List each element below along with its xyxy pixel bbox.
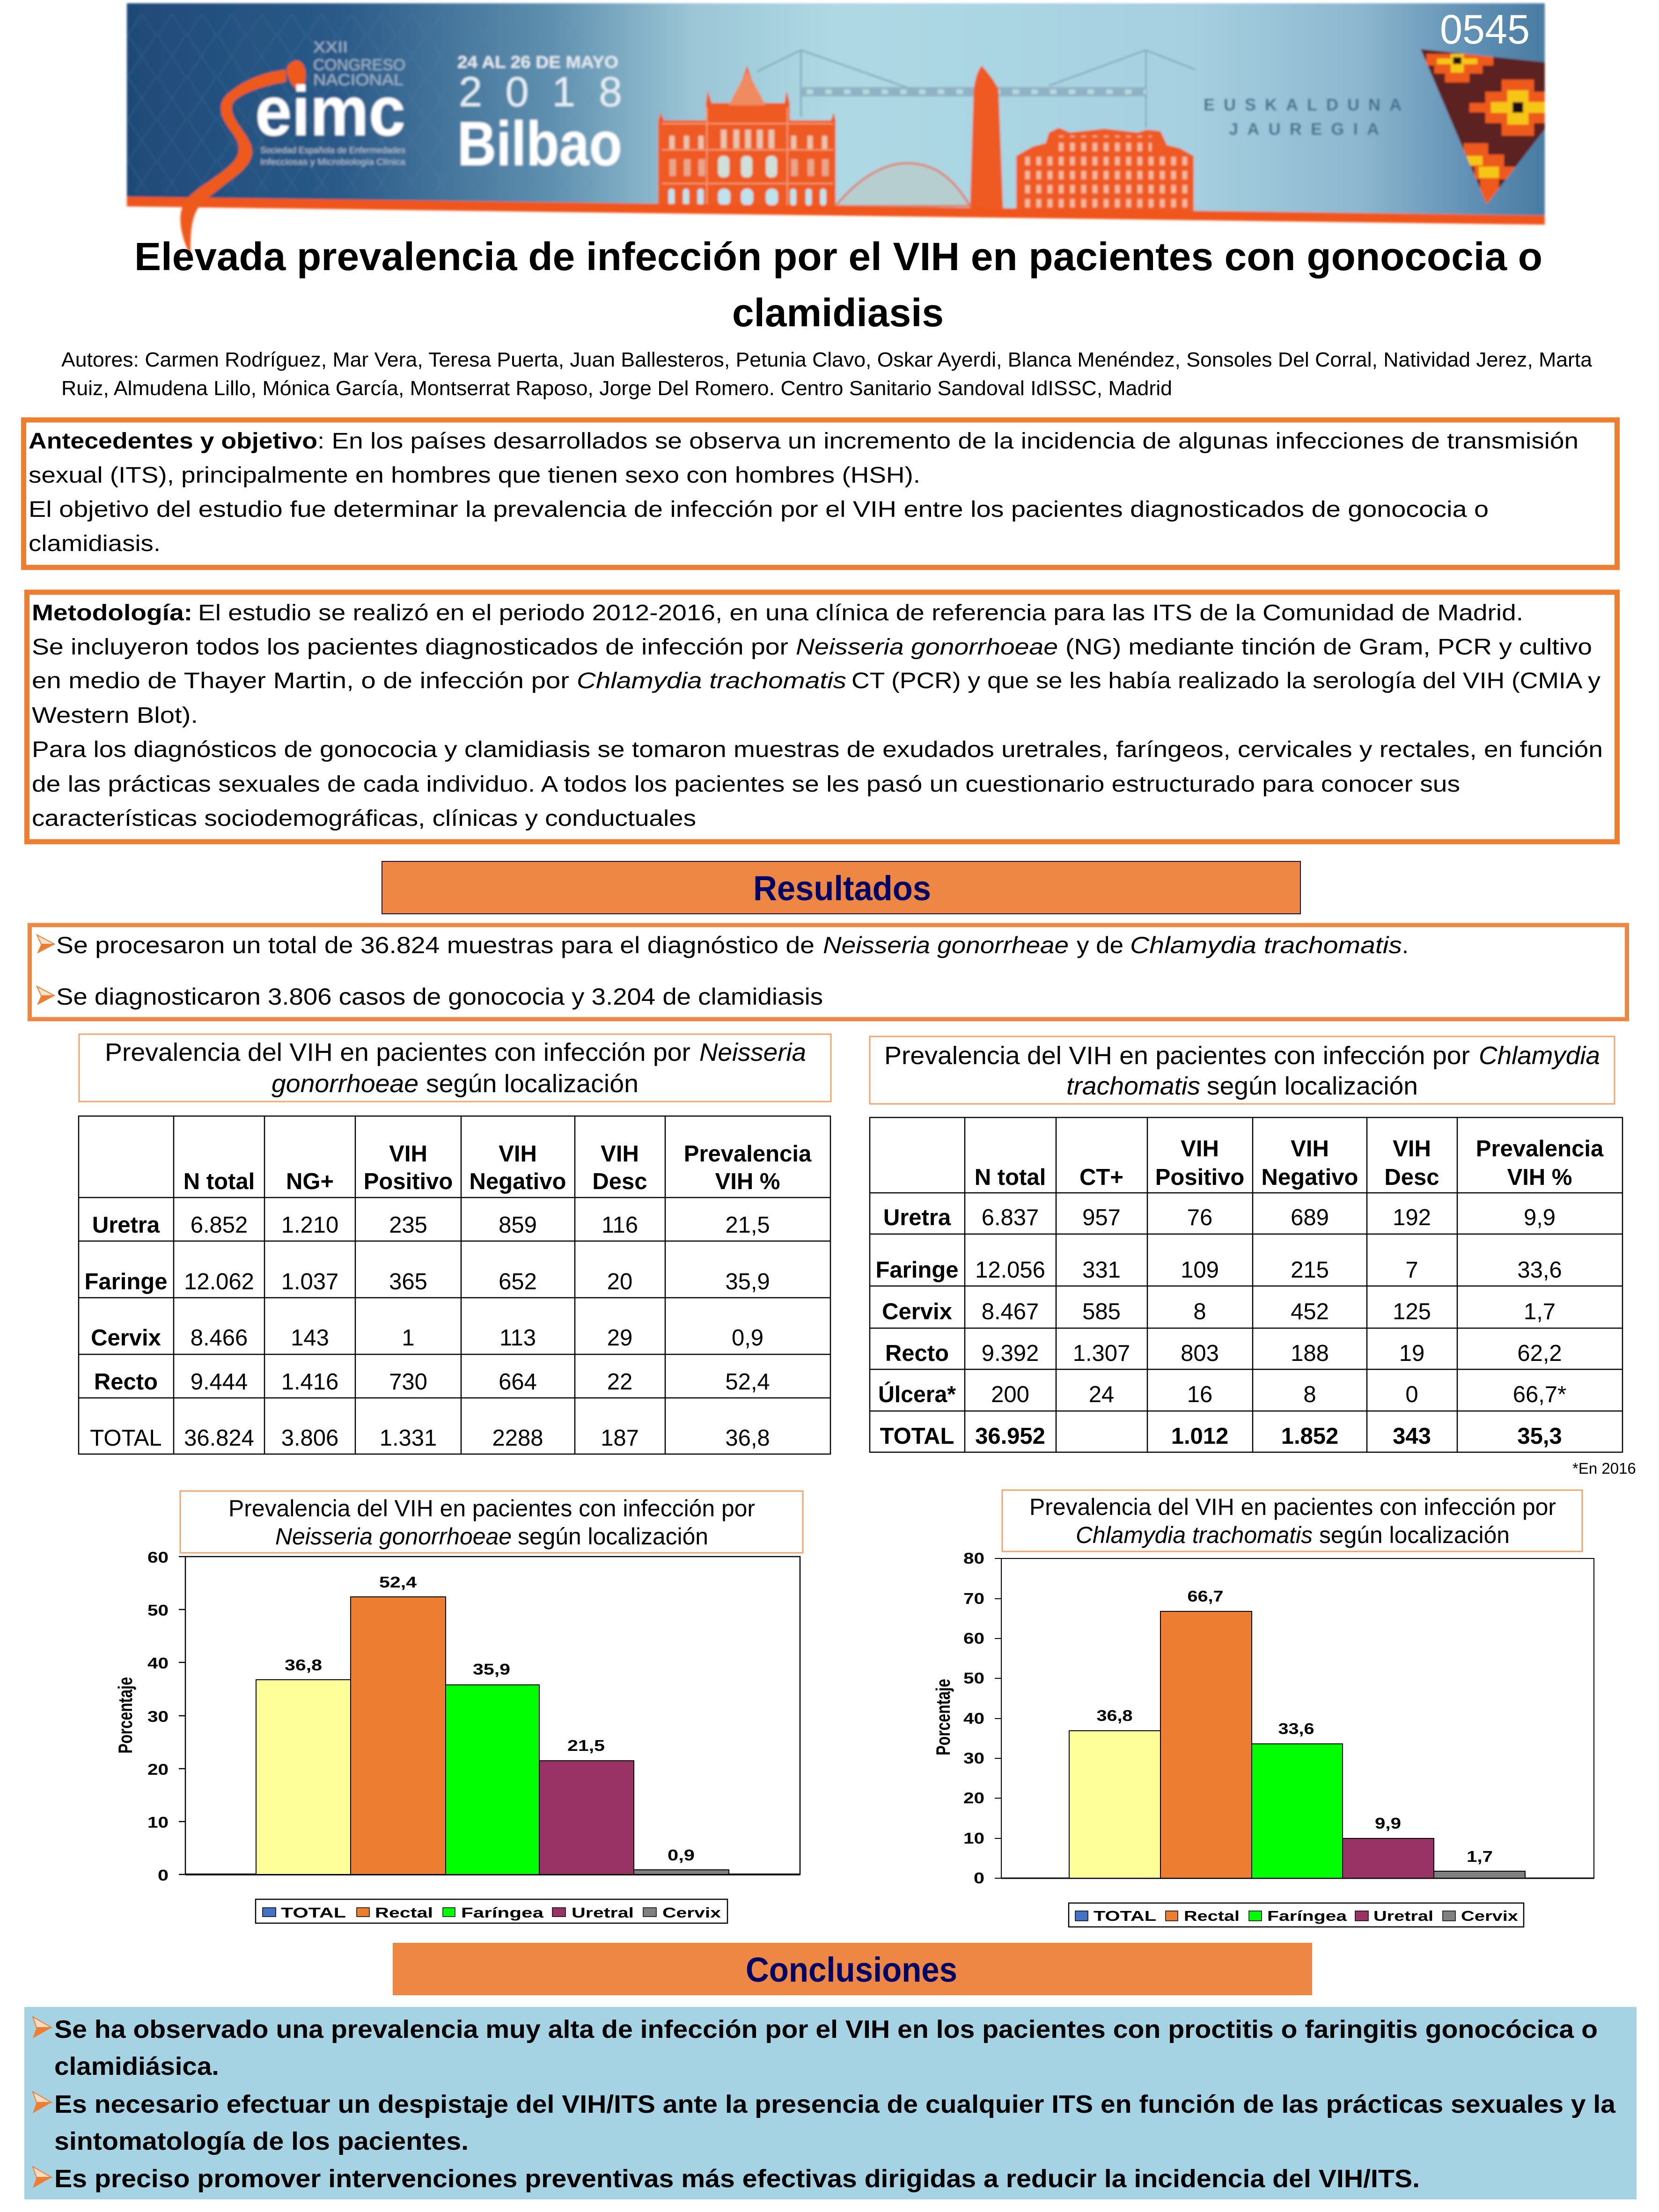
- legend: [256, 1899, 727, 1923]
- panel: metodologia: Metodología:: [32, 601, 192, 625]
- table header: VIH: [1291, 1136, 1329, 1161]
- panel: resultados summary: Neisseria gonorrheae: [823, 932, 1069, 958]
- logo and date text: Sociedad Española de Enfermedades: [260, 146, 405, 155]
- authors: Autores: Carmen Rodríguez, Mar Vera, Teresa Puerta, Juan Ballesteros, Petunia Clavo, Oskar Ayerdi, Blanca Menéndez, Sonsoles Del Corral, Natividad Jerez, Marta: [61, 348, 1593, 371]
- table row: Recto: 1.416: [281, 1369, 338, 1395]
- logo and date text: 24 AL 26 DE MAYO: [457, 52, 618, 72]
- panel: metodologia: Western Blot).: [32, 703, 198, 728]
- bridge: [757, 50, 1196, 128]
- legend: Cervix: [662, 1904, 721, 1921]
- icon: bullet arrow: [33, 2092, 51, 2113]
- table row: Uretra: 957: [1082, 1205, 1121, 1230]
- y axis labels: 20: [147, 1761, 169, 1778]
- logo and date text: XXII: [313, 38, 348, 56]
- y axis labels: 20: [963, 1789, 984, 1807]
- value labels: [1096, 1587, 1493, 1865]
- table heading: Chlamydia: según localización: [1207, 1072, 1418, 1100]
- logo and date text: Infecciosas y Microbiología Clínica: [260, 157, 406, 167]
- panel: resultados summary: [30, 925, 1627, 1019]
- table row: Faringe: 35,9: [725, 1269, 770, 1294]
- chart heading: Neisseria: según localización: [518, 1523, 708, 1550]
- table row: Cervix: 113: [499, 1325, 536, 1351]
- table row: Cervix: 8.466: [191, 1325, 248, 1351]
- y axis labels: 30: [147, 1708, 169, 1725]
- authors: [61, 348, 1593, 400]
- table heading: Chlamydia: trachomatis: [1066, 1072, 1200, 1100]
- heading: resultados: [382, 861, 1300, 914]
- table row: Recto: 730: [389, 1369, 427, 1395]
- bar chart: Neisseria gonorrhoeae: [114, 1549, 800, 1923]
- table row: TOTAL: 3.806: [281, 1426, 338, 1451]
- table row: Cervix: 125: [1393, 1299, 1431, 1324]
- table row: Cervix: 8.467: [982, 1299, 1039, 1324]
- table row: TOTAL: 1.331: [380, 1426, 437, 1451]
- y axis labels: 60: [963, 1630, 984, 1647]
- table header: VIH %: [715, 1169, 780, 1194]
- y axis labels: 0: [158, 1867, 169, 1884]
- table row: Faringe: [876, 1257, 1562, 1283]
- table row: Ulcera: 0: [1405, 1382, 1418, 1407]
- table row: Uretra: 6.852: [191, 1213, 248, 1238]
- table row: Ulcera: 66,7*: [1513, 1382, 1566, 1407]
- value labels: 66,7: [1187, 1587, 1224, 1605]
- table row: Recto: 9.444: [191, 1369, 248, 1395]
- table row: Cervix: 1,7: [1524, 1299, 1556, 1324]
- table heading: Neisseria: Neisseria: [699, 1038, 806, 1066]
- table row: Ulcera: 8: [1303, 1382, 1316, 1407]
- logo and date text: CONGRESO: [313, 56, 405, 74]
- legend: [1069, 1903, 1524, 1927]
- panel: conclusiones: clamidiásica.: [54, 2052, 219, 2080]
- table row: TOTAL: 36,8: [725, 1426, 770, 1451]
- table row: Faringe: 12.062: [184, 1269, 254, 1294]
- legend: Cervix: [1461, 1908, 1519, 1924]
- title: [134, 235, 1542, 335]
- bars: [1069, 1611, 1525, 1878]
- table: Neisseria gonorrhoeae: [79, 1116, 830, 1454]
- panel: conclusiones: [24, 2007, 1637, 2199]
- table row: TOTAL: TOTAL: [90, 1426, 162, 1451]
- panel: resultados summary: y de: [1077, 932, 1123, 958]
- panel: metodologia: Para los diagnósticos de gonococia y clamidiasis se tomaron muestras de exudados uretrales, faríngeos, cervicales y rectales, en función: [32, 737, 1603, 762]
- legend: TOTAL: [1094, 1908, 1156, 1924]
- legend: Uretral: [1373, 1908, 1433, 1924]
- table row: Recto: [94, 1369, 770, 1395]
- table row: TOTAL: 35,3: [1517, 1424, 1562, 1449]
- table header: NG+: [286, 1169, 334, 1194]
- table row: Uretra: 9,9: [1524, 1205, 1556, 1230]
- y axis labels: 40: [147, 1654, 169, 1672]
- table row: Cervix: 29: [607, 1325, 632, 1351]
- logo and date text: eimc: [255, 72, 405, 150]
- table row: Uretra: 76: [1187, 1205, 1212, 1230]
- icon: bullet arrow: [37, 986, 55, 1005]
- panel: resultados summary: Chlamydia trachomatis: [1130, 932, 1402, 958]
- panel: conclusiones: Se ha observado una prevalencia muy alta de infección por el VIH en los pacientes con proctitis o faringitis gonocócica o: [54, 2015, 1598, 2043]
- table row: Faringe: 109: [1181, 1257, 1219, 1283]
- panel: metodologia: en medio de Thayer Martin, o de infección por: [32, 669, 569, 693]
- table row: Cervix: Cervix: [882, 1299, 952, 1324]
- table row: Uretra: [883, 1205, 1556, 1230]
- panel: conclusiones: Es necesario efectuar un despistaje del VIH/ITS ante la presencia de cualquier ITS en función de las prácticas sexuales y la: [54, 2090, 1616, 2118]
- table row: Recto: 1.307: [1073, 1341, 1130, 1366]
- value labels: 33,6: [1278, 1720, 1314, 1737]
- table header: Positivo: [364, 1169, 453, 1194]
- table row: Recto: 62,2: [1517, 1341, 1562, 1366]
- table row: Uretra: 1.210: [281, 1213, 338, 1238]
- value labels: 35,9: [473, 1661, 510, 1678]
- y axis labels: 30: [963, 1749, 984, 1767]
- table row: Faringe: 652: [499, 1269, 537, 1294]
- authors: Ruiz, Almudena Lillo, Mónica García, Montserrat Raposo, Jorge Del Romero. Centro Sanitario Sandoval IdISSC, Madrid: [61, 377, 1172, 400]
- table header: N total: [184, 1169, 255, 1194]
- table row: TOTAL: 1.852: [1281, 1424, 1338, 1449]
- table header: [975, 1136, 1604, 1190]
- legend: Faríngea: [461, 1904, 544, 1921]
- value labels: [285, 1573, 695, 1864]
- legend: Faríngea: [1267, 1908, 1347, 1924]
- panel: metodologia: de las prácticas sexuales de cada individuo. A todos los pacientes se les pasó un cuestionario estructurado para conocer sus: [32, 772, 1460, 797]
- table row: TOTAL: 1.012: [1171, 1424, 1228, 1449]
- table row: Faringe: 1.037: [281, 1269, 338, 1294]
- panel: resultados summary: Se diagnosticaron 3.806 casos de gonococia y 3.204 de clamidiasis: [56, 984, 823, 1010]
- y axis labels: 50: [147, 1602, 169, 1619]
- y axis labels: 70: [963, 1590, 984, 1607]
- chart heading: Chlamydia: según localización: [1319, 1522, 1510, 1548]
- heading: resultados: Resultados: [753, 869, 931, 908]
- header banner: [127, 3, 1547, 256]
- y axis title: Porcentaje: [932, 1679, 954, 1756]
- table header: CT+: [1079, 1165, 1123, 1190]
- y axis labels: 50: [963, 1669, 984, 1687]
- table row: Ulcera: 16: [1187, 1382, 1212, 1407]
- legend: TOTAL: [281, 1904, 346, 1921]
- panel: metodologia: Neisseria gonorrhoeae: [796, 635, 1058, 660]
- table header: Positivo: [1155, 1165, 1244, 1190]
- table row: TOTAL: 2288: [492, 1426, 543, 1451]
- panel: metodologia: [27, 592, 1617, 842]
- table header: Prevalencia: [684, 1141, 812, 1167]
- ribbon: [180, 60, 306, 256]
- panel: antecedentes y objetivo: clamidiasis.: [29, 531, 161, 556]
- table row: Faringe: 215: [1291, 1257, 1329, 1283]
- chart heading: Chlamydia: Chlamydia trachomatis: [1076, 1522, 1313, 1548]
- panel: resultados summary: Se procesaron un total de 36.824 muestras para el diagnóstico de: [56, 932, 815, 958]
- logo and date text: JAUREGIA: [1229, 119, 1379, 139]
- title: Elevada prevalencia de infección por el VIH en pacientes con gonococia o: [134, 235, 1542, 279]
- panel: metodologia: (NG) mediante tinción de Gram, PCR y cultivo: [1065, 635, 1592, 660]
- value labels: 1,7: [1467, 1848, 1493, 1865]
- value labels: 21,5: [567, 1737, 605, 1754]
- table header: VIH: [1393, 1136, 1431, 1161]
- y axis labels: [147, 1549, 169, 1884]
- table header: Prevalencia: [1476, 1136, 1604, 1161]
- panel: conclusiones: Es preciso promover intervenciones preventivas más efectivas dirigidas a reducir la incidencia del VIH/ITS.: [54, 2165, 1420, 2193]
- y axis labels: [963, 1550, 984, 1887]
- table row: TOTAL: 36.824: [184, 1426, 254, 1451]
- arch: [836, 163, 970, 206]
- table row: TOTAL: TOTAL: [880, 1424, 954, 1449]
- table row: TOTAL: [880, 1424, 1562, 1449]
- table row: Uretra: 192: [1393, 1205, 1431, 1230]
- chart heading: Neisseria: Neisseria gonorrhoeae: [275, 1523, 512, 1550]
- icon: bullet arrow: [33, 2167, 51, 2188]
- y axis labels: 10: [963, 1830, 984, 1847]
- bottom stripe: [127, 197, 1545, 225]
- table row: Recto: 803: [1181, 1341, 1219, 1366]
- table header: N total: [975, 1165, 1046, 1190]
- panel: antecedentes y objetivo: El objetivo del estudio fue determinar la prevalencia de infección por el VIH entre los pacientes diagnosticados de gonococia o: [29, 497, 1489, 522]
- table heading: Neisseria: gonorrhoeae: [272, 1070, 418, 1098]
- table header: VIH: [389, 1141, 427, 1167]
- table row: Uretra: 859: [499, 1213, 537, 1238]
- table row: Cervix: 8: [1193, 1299, 1206, 1324]
- table row: Recto: 22: [607, 1369, 632, 1395]
- y axis labels: 0: [974, 1869, 984, 1887]
- table header: [184, 1141, 812, 1194]
- icon: bullet arrow: [33, 2017, 51, 2038]
- table row: Faringe: 33,6: [1517, 1257, 1562, 1283]
- table row: Ulcera: Úlcera*: [878, 1382, 956, 1407]
- y axis labels: 40: [963, 1710, 984, 1727]
- panel: metodologia: Se incluyeron todos los pacientes diagnosticados de infección por: [32, 635, 788, 660]
- obelisk: [970, 66, 1003, 212]
- table row: Recto: [885, 1341, 1562, 1366]
- table row: Uretra: Uretra: [883, 1205, 951, 1230]
- table row: TOTAL: [90, 1426, 770, 1451]
- table row: Recto: Recto: [885, 1341, 949, 1366]
- table row: Faringe: [85, 1269, 770, 1294]
- table row: Faringe: 331: [1082, 1257, 1121, 1283]
- table row: Recto: 19: [1399, 1341, 1424, 1366]
- value labels: 9,9: [1375, 1815, 1401, 1832]
- table row: TOTAL: 343: [1393, 1424, 1431, 1449]
- table row: Faringe: Faringe: [876, 1257, 958, 1283]
- logo and date text: NACIONAL: [313, 71, 404, 89]
- building right: [1016, 128, 1194, 211]
- table row: Recto: 664: [499, 1369, 537, 1395]
- table row: Cervix: Cervix: [91, 1325, 161, 1351]
- panel: metodologia: El estudio se realizó en el periodo 2012-2016, en una clínica de referencia para las ITS de la Comunidad de Madrid.: [198, 601, 1523, 625]
- panel: metodologia: características sociodemográficas, clínicas y conductuales: [32, 806, 696, 831]
- table header: Negativo: [1262, 1165, 1358, 1190]
- plot frame: [995, 1558, 1594, 1878]
- chart heading: Chlamydia: [1002, 1490, 1582, 1551]
- table row: Faringe: 20: [607, 1269, 632, 1294]
- table row: Faringe: 12.056: [975, 1257, 1045, 1283]
- table heading: Chlamydia: Chlamydia: [1479, 1042, 1600, 1070]
- value labels: 0,9: [668, 1846, 695, 1864]
- heading: conclusiones: [393, 1943, 1312, 1995]
- panel: antecedentes y objetivo: Antecedentes y objetivo: [29, 429, 317, 454]
- table header: VIH: [601, 1141, 639, 1167]
- icon: bullet arrow: [37, 935, 55, 954]
- table row: Cervix: 585: [1082, 1299, 1121, 1324]
- table row: Cervix: 143: [291, 1325, 329, 1351]
- table row: Recto: 188: [1291, 1341, 1329, 1366]
- panel: antecedentes y objetivo: [23, 420, 1617, 567]
- chart heading: Neisseria: Prevalencia del VIH en pacientes con infección por: [228, 1495, 755, 1521]
- panel: metodologia: CT (PCR) y que se les había realizado la serología del VIH (CMIA y: [852, 669, 1600, 693]
- plot frame: [179, 1557, 800, 1874]
- table row: Faringe: Faringe: [85, 1269, 167, 1294]
- table row: Uretra: 6.837: [982, 1205, 1039, 1230]
- table row: Recto: Recto: [94, 1369, 158, 1395]
- value labels: 36,8: [285, 1656, 322, 1674]
- table footnote: *En 2016: [1572, 1460, 1636, 1477]
- table heading: Neisseria: según localización: [426, 1070, 639, 1098]
- table row: Uretra: [92, 1213, 770, 1238]
- table row: Recto: 9.392: [982, 1341, 1039, 1366]
- table row: Faringe: 7: [1405, 1257, 1418, 1283]
- table heading: Chlamydia: Prevalencia del VIH en pacientes con infección por: [884, 1042, 1470, 1070]
- table header: VIH: [499, 1141, 537, 1167]
- building left: [658, 66, 836, 211]
- table header: Desc: [592, 1169, 647, 1194]
- table header: Desc: [1384, 1165, 1439, 1190]
- value labels: 36,8: [1096, 1707, 1133, 1724]
- triangle motif: [1414, 47, 1547, 206]
- logo and date text: Bilbao: [457, 109, 622, 179]
- table row: TOTAL: 36.952: [975, 1424, 1045, 1449]
- y axis labels: 60: [147, 1549, 169, 1566]
- legend: Rectal: [1184, 1908, 1240, 1924]
- panel: antecedentes y objetivo: sexual (ITS), principalmente en hombres que tienen sexo con hombres (HSH).: [29, 463, 920, 488]
- table row: Faringe: 365: [389, 1269, 427, 1294]
- table row: Cervix: [882, 1299, 1556, 1324]
- panel: conclusiones: sintomatología de los pacientes.: [54, 2127, 469, 2155]
- logo and date text: EUSKALDUNA: [1204, 95, 1402, 114]
- table row: TOTAL: 187: [601, 1426, 639, 1451]
- table header: Negativo: [470, 1169, 566, 1194]
- panel: resultados summary: .: [1402, 932, 1409, 958]
- table row: Ulcera: 24: [1089, 1382, 1114, 1407]
- table row: Cervix: 1: [402, 1325, 415, 1351]
- table row: Uretra: 689: [1291, 1205, 1329, 1230]
- table row: Recto: 52,4: [725, 1369, 770, 1395]
- table row: Uretra: Uretra: [92, 1213, 160, 1238]
- table row: Cervix: 452: [1291, 1299, 1329, 1324]
- legend: Uretral: [572, 1904, 634, 1921]
- table heading: Neisseria: [79, 1034, 831, 1102]
- table row: Uretra: 116: [602, 1213, 638, 1238]
- value labels: 52,4: [379, 1573, 417, 1591]
- table header: VIH: [1181, 1136, 1219, 1161]
- bar chart: Chlamydia trachomatis: [932, 1550, 1594, 1927]
- table heading: Chlamydia: [870, 1036, 1615, 1104]
- heading: conclusiones: Conclusiones: [746, 1950, 957, 1989]
- bars: [256, 1597, 729, 1874]
- logo and date text: [255, 38, 1402, 179]
- table row: Ulcera: 200: [991, 1382, 1029, 1407]
- table row: Cervix: 0,9: [732, 1325, 763, 1351]
- table row: Uretra: 21,5: [725, 1213, 770, 1238]
- title: clamidiasis: [732, 291, 944, 335]
- table: Chlamydia trachomatis: [870, 1117, 1622, 1452]
- logo and date text: 2 0 1 8: [459, 69, 622, 116]
- table row: Cervix: [91, 1325, 763, 1351]
- chart heading: Neisseria: [180, 1491, 803, 1553]
- chart heading: Chlamydia: Prevalencia del VIH en pacientes con infección por: [1029, 1494, 1556, 1520]
- y axis labels: 10: [147, 1814, 169, 1831]
- y axis labels: 80: [963, 1550, 984, 1567]
- panel: metodologia: Chlamydia trachomatis: [577, 669, 846, 693]
- abstract number: 0545: [1440, 6, 1530, 52]
- table heading: Neisseria: Prevalencia del VIH en pacientes con infección por: [105, 1038, 690, 1066]
- panel: antecedentes y objetivo: : En los países desarrollados se observa un incremento de la incidencia de algunas infecciones de transmisión: [317, 429, 1578, 454]
- table row: Uretra: 235: [389, 1213, 427, 1238]
- table row: Ulcera: [878, 1382, 1566, 1407]
- legend: Rectal: [375, 1904, 433, 1921]
- y axis title: Porcentaje: [114, 1677, 136, 1754]
- table header: VIH %: [1507, 1165, 1572, 1190]
